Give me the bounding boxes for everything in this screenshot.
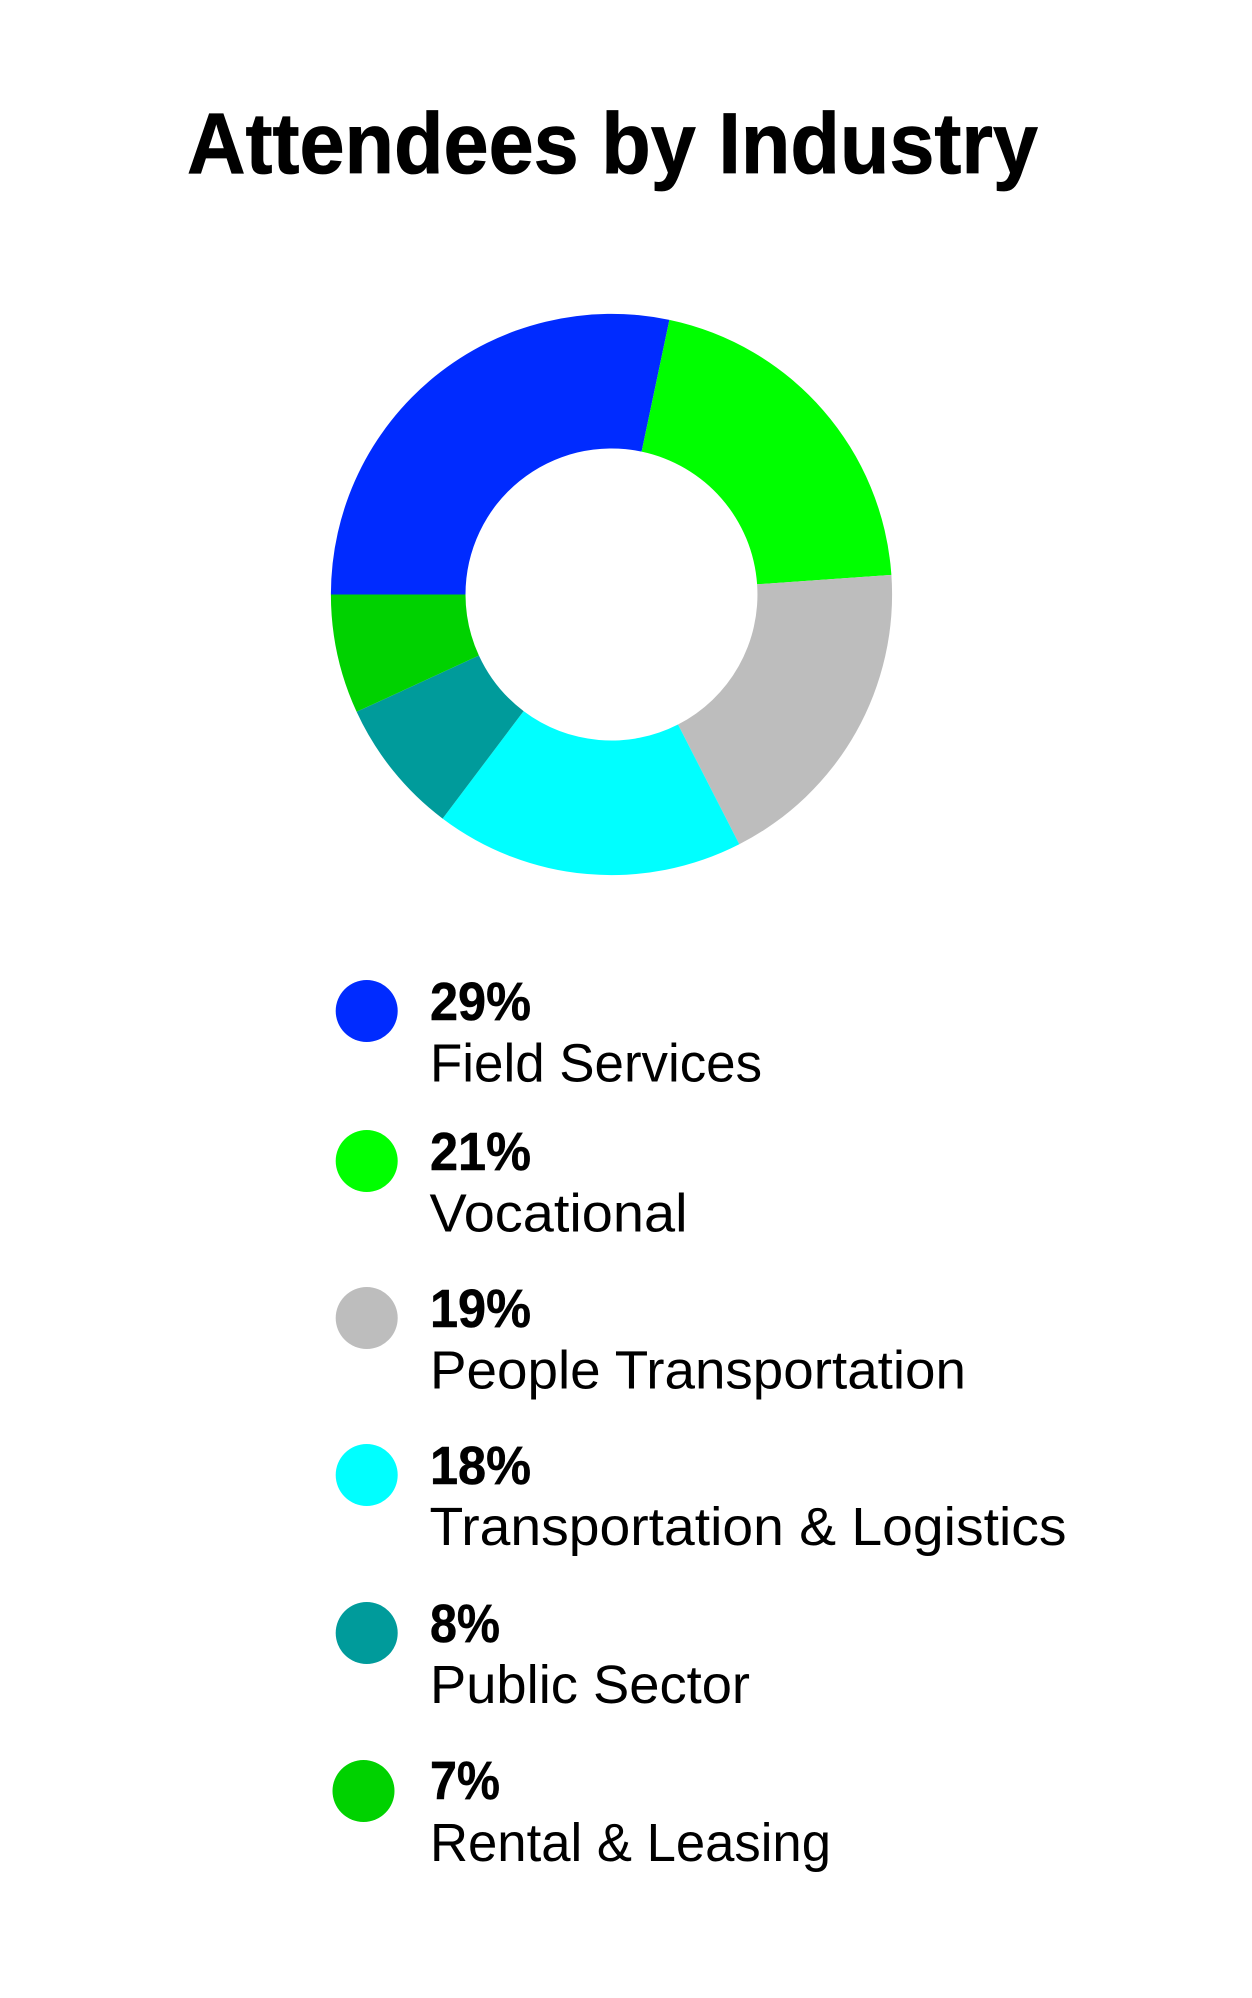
segment: Transportation & Logistics 18% xyxy=(443,711,739,875)
legend item: People Transportation: 19% xyxy=(430,1279,531,1339)
donut chart xyxy=(331,314,892,875)
legend xyxy=(332,972,1066,1873)
legend item: People Transportation xyxy=(336,1279,966,1400)
legend item: Public Sector: 8% xyxy=(430,1594,500,1654)
segment: People Transportation 19% xyxy=(678,575,892,844)
legend item: People Transportation: People Transportation xyxy=(430,1340,966,1400)
legend item: Transportation & Logistics: 18% xyxy=(430,1436,531,1496)
legend item: Vocational xyxy=(336,1122,688,1244)
legend item: Rental & Leasing: 7% xyxy=(430,1751,500,1811)
legend item: Transportation & Logistics xyxy=(336,1436,1066,1557)
legend item: Rental & Leasing xyxy=(332,1751,831,1873)
legend item: Public Sector: Public Sector xyxy=(430,1655,750,1715)
segment: Field Services 29% xyxy=(331,314,669,594)
title: Attendees by Industry xyxy=(187,96,1038,192)
segment: Public Sector 8% xyxy=(357,656,524,819)
segment: Rental & Leasing 7% xyxy=(331,594,479,712)
legend item: Field Services: Field Services xyxy=(430,1034,762,1094)
legend item: Field Services: 29% xyxy=(430,972,531,1032)
segment: Vocational 21% xyxy=(642,320,891,584)
legend item: Transportation & Logistics: Transportation & Logistics xyxy=(430,1497,1066,1557)
legend item: Field Services xyxy=(336,972,762,1094)
legend item: Vocational: Vocational xyxy=(430,1184,688,1244)
legend item: Public Sector xyxy=(336,1594,750,1715)
legend item: Vocational: 21% xyxy=(430,1122,531,1182)
legend item: Rental & Leasing: Rental & Leasing xyxy=(430,1813,831,1873)
